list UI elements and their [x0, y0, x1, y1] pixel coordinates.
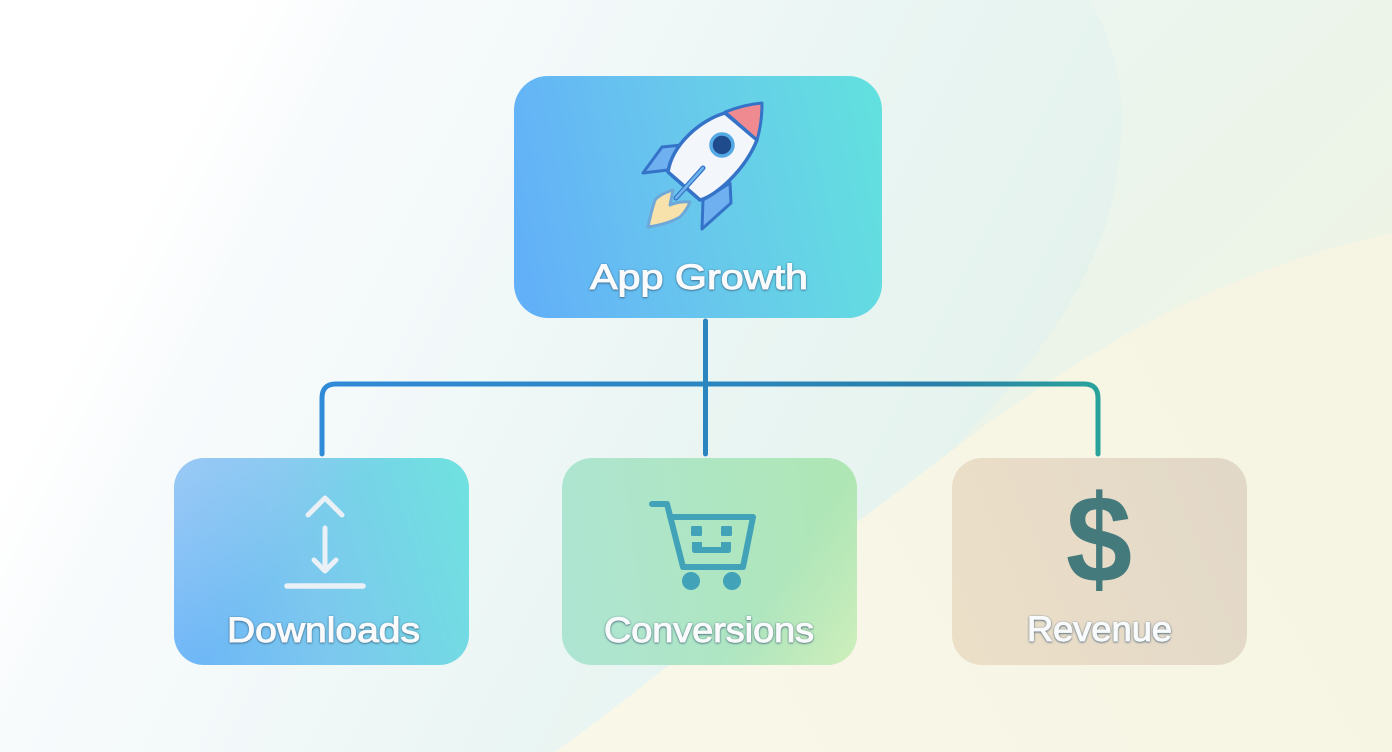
label: Downloads: Downloads	[227, 611, 420, 650]
label: App Growth: App Growth	[590, 258, 808, 297]
connector lines	[322, 321, 1098, 454]
panel: Downloads	[174, 458, 469, 665]
panel: Revenue	[952, 458, 1247, 665]
panel: App Growth	[514, 76, 882, 318]
icon: dollar sign: $	[1066, 470, 1132, 609]
panel: Conversions	[562, 458, 857, 665]
label: Revenue: Revenue	[1027, 610, 1172, 649]
icon: smiling shopping cart	[652, 504, 753, 590]
icon: rocket	[643, 103, 762, 229]
label: Conversions: Conversions	[604, 611, 814, 650]
icon: download arrow	[287, 498, 363, 586]
